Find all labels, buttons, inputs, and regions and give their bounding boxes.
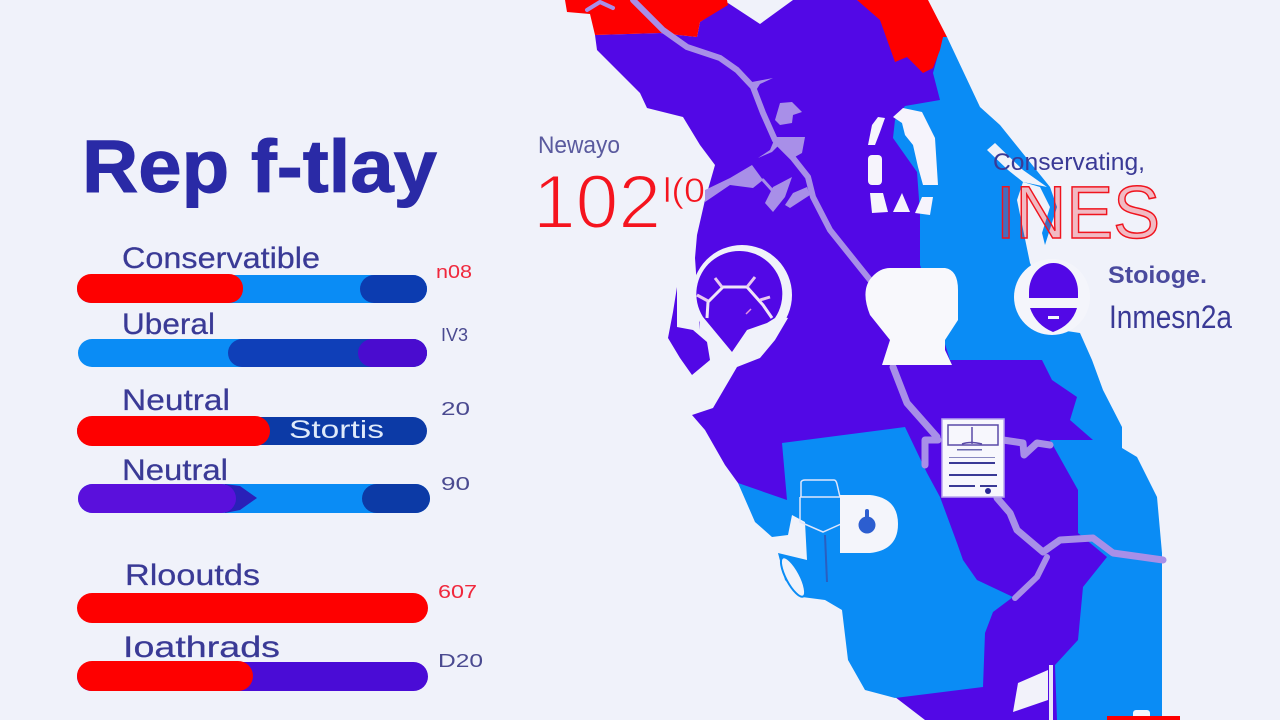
icon: red box at bottom edge — [1107, 710, 1180, 720]
bar row: Conservatible — [77, 242, 472, 303]
bar row: Ioathrads: D20 — [438, 651, 483, 671]
callout: Storage — [1108, 262, 1232, 335]
callout: Newayo 102: Newayo — [538, 132, 620, 159]
bar row: Ioathrads: Ioathrads — [123, 631, 280, 664]
bar row: Neutral 1: Neutral — [122, 384, 230, 417]
rivers — [587, 0, 1163, 598]
bar row: Conservatible: Conservatible — [122, 242, 320, 275]
title: Rep f-tlay — [82, 125, 437, 208]
bar row: Rlooutds — [77, 559, 477, 623]
icon: gauge ring — [668, 245, 792, 375]
bar row: Liberal: IV3 — [441, 325, 468, 345]
bar row: Neutral 1: Stortis — [289, 416, 384, 444]
bar row: Neutral 2 — [78, 454, 470, 513]
icon: drop badge — [840, 495, 898, 553]
lake: east coast — [987, 143, 1047, 187]
map region: central blue — [738, 427, 1013, 698]
bar row: Neutral 2: Neutral — [122, 454, 228, 487]
bar row: Rlooutds: Rlooutds — [125, 559, 260, 592]
bar row: Rlooutds: 607 — [438, 582, 477, 602]
bar row: Liberal: Uberal — [122, 308, 215, 341]
callout: Storage: Stoioge. — [1108, 262, 1207, 289]
bar row: Liberal — [78, 308, 468, 367]
icon: white figure — [868, 108, 938, 215]
icon: document — [942, 419, 1004, 497]
callout: Conservating INES: INES — [996, 171, 1160, 254]
bar row: Neutral 2: 90 — [441, 474, 470, 494]
callout: Newayo 102: l(0 — [663, 172, 705, 210]
bar row: Neutral 1: 20 — [441, 399, 470, 419]
callout: Storage: Inmesn2a — [1109, 299, 1232, 335]
lake: lower west — [776, 554, 810, 600]
map region: red north-east — [857, 0, 947, 73]
icon: flag — [1013, 665, 1053, 720]
bar row: Neutral 1 — [77, 384, 470, 446]
icon: white head silhouette — [865, 268, 958, 365]
callout: Conservating INES: Conservating, — [993, 149, 1145, 176]
bar row: Conservatible: n08 — [436, 262, 472, 282]
map region: red north-west — [565, 0, 728, 37]
icon: helmet badge — [1014, 259, 1090, 335]
bar row: Ioathrads — [77, 631, 483, 691]
callout: Newayo 102: 102 — [533, 160, 661, 245]
map — [565, 0, 1163, 720]
map region: purple base — [595, 0, 1110, 720]
callout: Newayo 102 — [533, 132, 705, 245]
icon: wine glass — [800, 480, 841, 582]
map region: east blue — [893, 37, 1162, 720]
